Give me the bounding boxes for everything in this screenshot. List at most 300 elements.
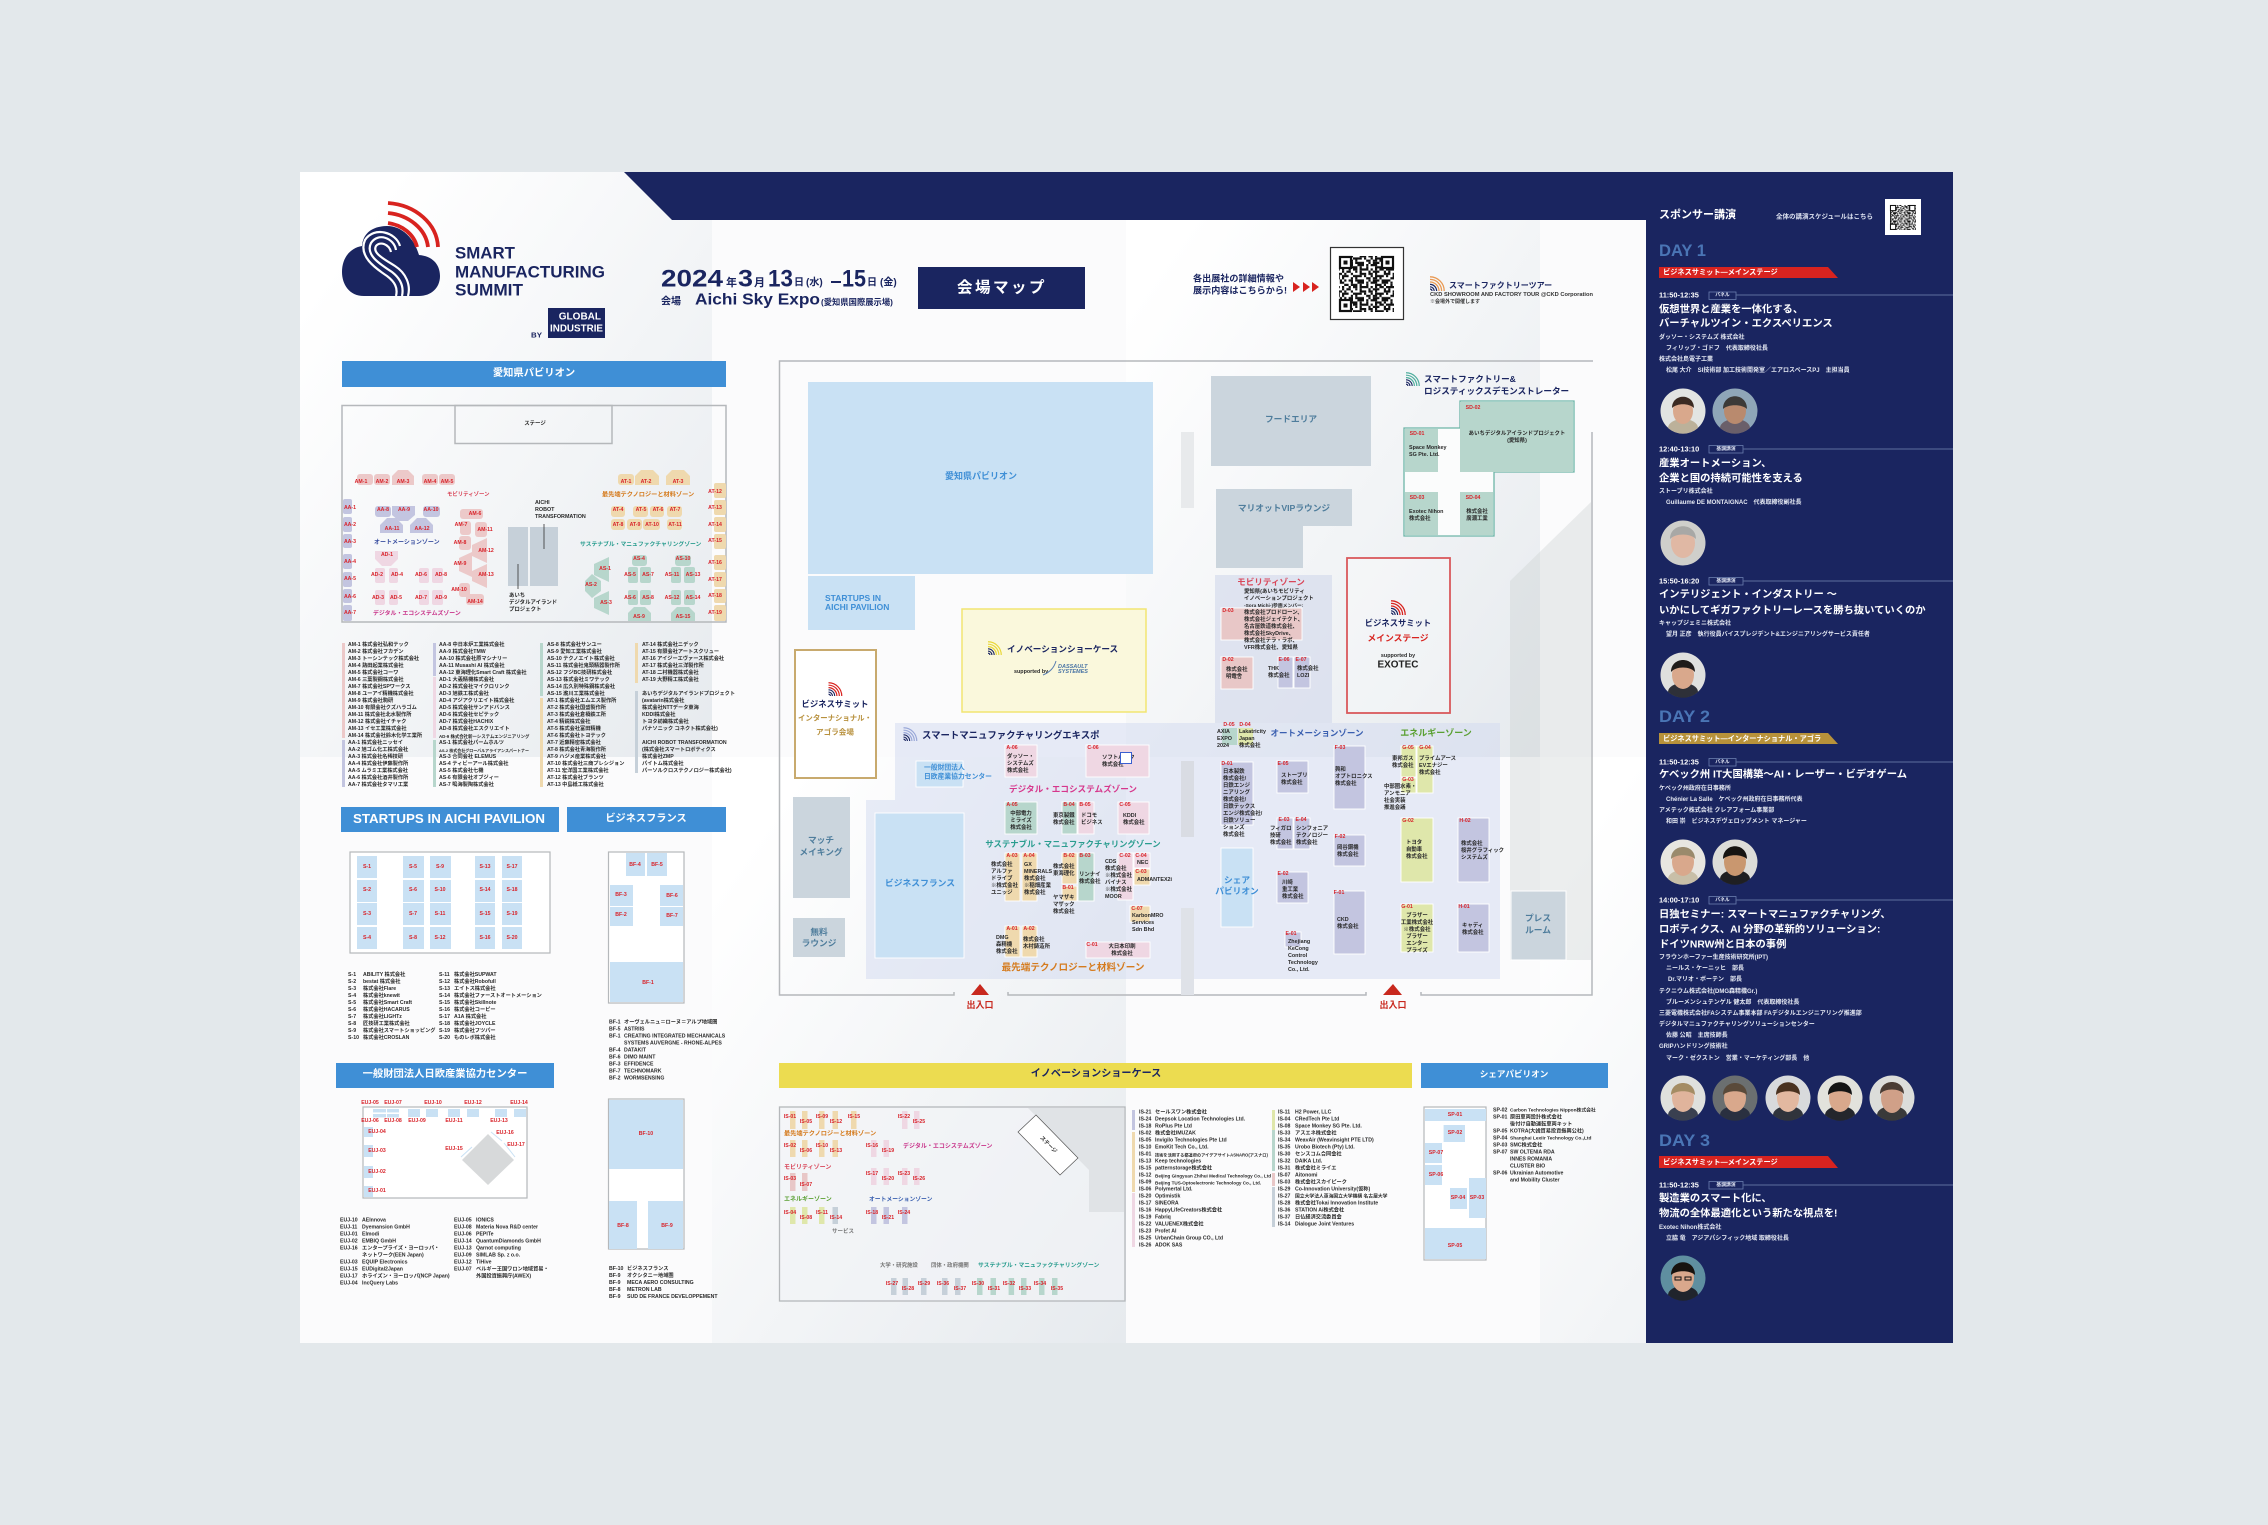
talk: logistics optimisation: 物流の全体最適化という新たな視点を! [1659,1206,1837,1220]
booths: mobility zone: 株式会社ジェイテクト、 [1244,615,1303,623]
exhibitor list: Startups: 株式会社コーピー [454,1005,496,1013]
exhibitor list: Aichi pavilion: AA-7 株式会社タマリ工業 [348,780,409,788]
floor plan: EU-Japan Centre: EUJ-14 [510,1100,528,1106]
floor plan: innovation showcase: IS-10 [816,1143,828,1149]
heading: share pavilion: シェアパビリオン [1480,1068,1549,1079]
booths: energy zone: G-01 [1401,904,1413,910]
floor plan: Aichi pavilion: AS-10 [676,556,690,562]
exhibitor list: Startups: S-8 [348,1021,356,1027]
logo: Smart Manufacturing Summit [342,203,605,340]
exhibitor list: Business France upper: BF-5 [609,1027,621,1033]
booths: sustainable and advanced row: A-03 [1006,853,1018,859]
floor plan: Aichi pavilion: AT-1 [621,479,632,485]
floor plan: Aichi pavilion: AS-5 [624,572,636,578]
exhibitor list: Aichi pavilion: AS-13 株式会社ミワテック [547,675,610,683]
booths: sustainable and advanced row: GX [1024,862,1032,868]
floor plan: Aichi pavilion: AS-14 [686,595,700,601]
event date and venue [661,266,897,308]
floor plan: innovation showcase: IS-32 [1003,1281,1015,1287]
booths: automation zone: 岡谷鋼機 [1337,843,1359,851]
exhibitor list: Aichi pavilion: AT-3 株式会社倉橋鉄工所 [547,710,607,718]
talk: Quebec: Chénier La Salle ケベック州政府在日事務所代表 [1666,795,1803,803]
exhibitor list: share pavilion: SP-05 [1493,1129,1508,1135]
booths: second row: ミライズ [1010,816,1032,824]
zone heading: mobility: モビリティゾーン [1237,576,1305,587]
floor plan: innovation showcase: IS-35 [1051,1286,1063,1292]
floor plan: Startups: S-18 [507,887,518,893]
mobility booths [357,470,487,605]
floor plan: Aichi pavilion: AT-13 [708,505,722,511]
booths: second row: ビジネス [1081,818,1103,826]
exhibitor list: Startups: 匠技研工業株式会社 [363,1019,411,1027]
floor plan: innovation showcase: IS-06 [800,1148,812,1154]
exhibitor list: share pavilion: SP-04 [1493,1136,1508,1142]
exhibitor list: EU-Japan Centre: IONICS [476,1218,494,1224]
day 3 stage banner: ビジネスサミット―メインステージ [1663,1158,1778,1166]
talk: Germany NRW seminar: 14:00-17:10 [1659,896,1699,904]
floor plan: Aichi pavilion: AS-3 [600,600,612,606]
day 2 stage banner: ビジネスサミット―インターナショナル・アゴラ [1663,734,1821,743]
speaker photo [1818,1076,1862,1121]
floor plan: Aichi pavilion: AT-7 [670,507,681,513]
venue outline [780,361,1593,995]
floor plan: Startups: S-12 [435,935,446,941]
exhibitor list: innovation showcase: Profet AI [1155,1229,1177,1235]
floor plan: Business France lower [608,1099,684,1249]
talk: intelligent industry [1659,576,1953,638]
smart factory tour note [1430,277,1593,305]
floor plan: Aichi pavilion: AA-8 [377,507,389,513]
booths: digital ecosystem zone upper: C-06 [1087,745,1099,751]
floor plan: innovation showcase: IS-13 [830,1148,842,1154]
booths: automation zone: F-03 [1335,745,1345,751]
floor plan: Aichi pavilion: AA-1 [344,505,356,511]
smart factory tour note: スマートファクトリーツアー [1449,280,1552,290]
floor plan: Aichi pavilion: AM-8 [454,540,466,546]
event date and venue: 15 [842,266,866,292]
exhibitor list: EU-Japan Centre: ベルギー王国ワロン地域貿易・ [476,1265,549,1273]
exhibitor list: innovation showcase: IS-34 [1278,1138,1291,1144]
floor plan: EU-Japan Centre: EUJ-17 [507,1142,525,1148]
exhibitor list: share pavilion: SP-06 [1493,1171,1508,1177]
booths: energy zone: 株式会社 [1406,852,1428,860]
booths: D-04 and D-05: EXPO [1217,736,1232,742]
exhibitor list: Aichi pavilion: AD-7 株式会社HACHIX [439,717,494,725]
floor plan: Aichi pavilion: AD-7 [415,595,427,601]
exhibitor list: innovation showcase: Aitonomi [1295,1173,1318,1179]
exhibitor list: EU-Japan Centre: EUJ-08 [454,1225,472,1231]
floor plan: EU-Japan Centre: EUJ-10 [424,1100,442,1106]
floor plan: EU-Japan Centre: EUJ-12 [464,1100,482,1106]
booths: sustainable and advanced row: A-04 [1023,853,1035,859]
booths: sustainable and advanced row: 株式会社 [1053,862,1075,870]
booths: energy zone: 株式会社 [1461,839,1483,847]
floor plan: Startups [350,852,550,953]
exhibitor list: Business France lower: BF-8 [609,1287,621,1293]
speaker photo [1660,1076,1706,1121]
exhibitor list: innovation showcase: ADOK SAS [1155,1243,1183,1249]
zone label: sustainable manufacturing: サステナブル・マニュファクチャリングゾーン [580,540,702,548]
exhibitor list: Startups: S-16 [439,1007,450,1013]
booths: automation zone: 株式会社 [1270,838,1292,846]
floor plan: Business France lower: BF-8 [617,1223,629,1229]
exhibitor list: innovation showcase: IS-36 [1278,1208,1291,1214]
exhibitor list: Startups: S-10 [348,1035,359,1041]
booths: automation zone: 株式会社 [1282,892,1304,900]
area: matchmaking [793,797,850,898]
floor plan: innovation showcase: IS-11 [816,1210,828,1216]
booths: mobility zone: 株式会社テラ・ラボ、 [1244,636,1298,644]
floor plan: Startups: S-10 [435,887,446,893]
entrance arrow right: 出入口 [1379,999,1407,1010]
exhibitor list: Aichi pavilion: AD-6 株式会社セピテック [439,710,499,718]
floor plan: Aichi pavilion: AD-2 [371,572,383,578]
booths: automation zone: KeCong [1288,946,1309,952]
booths: D-04 and D-05: Japan [1239,736,1255,742]
floor plan: Aichi pavilion: AA-4 [344,559,356,565]
floor plan: Business France lower: BF-10 [639,1131,653,1137]
logo: Smart Manufacturing Summit: SUMMIT [455,280,524,300]
booths: sustainable and advanced row: ※株式会社 [1105,871,1133,879]
exhibitor list: Business France lower: ビジネスフランス [627,1264,668,1272]
booths: mobility zone: 株式会社 [1297,664,1319,672]
exhibitor list: Aichi pavilion: AD-5 株式会社サンアドバンス [439,703,510,711]
floor plan: Aichi pavilion: AT-4 [613,507,624,513]
exhibitor list: innovation showcase: WeavAir (Weavinsight PTE LTD) [1295,1138,1374,1144]
panel: main venue map [780,361,1593,1010]
floor plan: Aichi pavilion: AS-4 [633,556,645,562]
booths: automation zone: 株式会社 [1281,778,1303,786]
exhibitor list: Aichi pavilion: AS-7 鳴海製陶株式会社 [439,780,495,788]
exhibitor list: innovation showcase: Polymertal Ltd. [1155,1187,1193,1193]
area: innovation showcase [962,609,1146,712]
floor plan: Aichi pavilion: AT-6 [653,507,664,513]
booths: automation zone: フィガロ [1270,824,1291,832]
booths: sustainable and advanced row: 株式会社 [1053,907,1075,915]
exhibitor list: Aichi pavilion: AT-6 株式会社トヨテック [547,731,606,739]
floor plan: innovation showcase: IS-31 [988,1286,1000,1292]
panel: Business France [567,807,726,1300]
digital ecosystem booths [375,551,443,605]
exhibitor list: innovation showcase: 株式会社IMUZAK [1155,1129,1196,1137]
floor plan: Business France upper: BF-6 [666,893,678,899]
floor plan: EU-Japan Centre: EUJ-11 [445,1118,463,1124]
area: Startups in Aichi pavilion: AICHI PAVILION [825,602,889,612]
talk: intelligent industry: いかにしてギガファクトリーレースを勝ち抜いていくのか [1659,604,1926,616]
booths: front row: C-01 [1086,942,1098,948]
exhibitor list: EU-Japan Centre: EUJ-17 [340,1274,358,1280]
area: Startups in Aichi pavilion [808,576,915,630]
exhibitor list: Aichi pavilion: (株式会社スマートロボティクス [642,745,716,753]
exhibitor list: innovation showcase: IS-28 [1278,1201,1291,1207]
talk: digital twin: バーチャルツイン・エクスペリエンス [1659,318,1833,330]
floor plan: Aichi pavilion: AT-8 [613,522,624,528]
exhibitor list: innovation showcase: IS-17 [1139,1201,1152,1207]
exhibitor list: innovation showcase: IS-13 [1139,1159,1152,1165]
floor plan: Aichi pavilion: AM-2 [376,479,388,485]
area: free lounge [793,918,845,957]
floor plan: innovation showcase: オートメーションゾーン [869,1196,933,1203]
booths: energy zone: 桜井グラフィック [1461,846,1504,854]
exhibitor list: Aichi pavilion: AT-11 宏洋国工業株式会社 [547,766,609,774]
exhibitor list: innovation showcase: DAIKA Ltd. [1295,1159,1323,1165]
booths: energy zone: G-04 [1419,745,1431,751]
exhibitor list: Aichi pavilion: トヨタ紡織株式会社 [642,717,690,725]
heading: EU-Japan Centre: 一般財団法人日欧産業協力センター [363,1067,527,1080]
exhibitor list: innovation showcase: 国立大学法人東海国立大学機構 名古屋大学 [1295,1192,1388,1199]
exhibitor list: EU-Japan Centre: Qarnot computing [476,1246,521,1252]
area: smart factory and logistics demonstrator: SD-01 [1410,431,1424,437]
floor plan: innovation showcase: 大学・研究施設 [880,1261,918,1269]
booths: front row: A-02 [1023,926,1035,932]
floor plan: share pavilion: SP-04 [1451,1195,1465,1201]
floor plan: Startups: S-3 [363,911,371,917]
booths: automation zone: D-01 [1221,761,1233,767]
talk: industrial automation: 企業と国の持続可能性を支える [1659,472,1803,484]
booths: energy zone: 東邦ガス [1392,754,1414,762]
exhibitor list: share pavilion: SP-01 [1493,1115,1508,1121]
exhibitor list: innovation showcase: IS-19 [1139,1215,1152,1221]
area: smart factory and logistics demonstrator: SD-02 [1466,405,1480,411]
exhibitor list: Startups: 株式会社Robofull [454,977,496,985]
booths: mobility zone: 愛知県(あいちモビリティ [1244,587,1305,595]
floor plan: EU-Japan Centre: EUJ-04 [368,1129,386,1135]
booths: energy zone: G-02 [1402,818,1414,824]
floor plan: innovation showcase: IS-07 [800,1182,812,1188]
talk: logistics optimisation [1659,1180,1953,1242]
floor plan: Aichi pavilion: AA-5 [344,576,356,582]
floor plan: EU-Japan Centre: EUJ-03 [368,1148,386,1154]
booths: automation zone: Zhejiang [1288,939,1310,945]
booths: mobility zone: 明電舎 [1226,672,1243,680]
heading: Startups: STARTUPS IN AICHI PAVILION [353,812,545,826]
booths: automation zone: 株式会社 [1335,779,1357,787]
event date and venue: 2024 [661,266,724,292]
talk: Quebec: 和田 崇 ビジネスデヴェロップメント マネージャー [1666,817,1807,825]
floor plan: EU-Japan Centre: EUJ-05 [361,1100,379,1106]
talk: Germany NRW seminar: フラウンホーファー生産技術研究所(IPT) [1659,953,1768,961]
booths: automation zone: 興和 [1335,765,1346,773]
floor plan: Startups: S-1 [363,864,371,870]
area: Business Summit International Agora [795,650,876,778]
exhibitor list: Startups: S-11 [439,972,450,978]
area: smart factory and logistics demonstrator: Space Monkey [1409,445,1446,451]
exhibitor list: Aichi pavilion: AM-5 株式会社コーワ [348,668,398,676]
booths: second row [1005,802,1149,834]
exhibitor list: Startups: S-7 [348,1014,356,1020]
booths: sustainable and advanced row: B-03 [1079,853,1091,859]
booths: second row: A-05 [1006,802,1018,808]
area: innovation showcase: SYSTEMES [1058,669,1088,675]
logo: Smart Manufacturing Summit: BY [531,330,542,340]
booths: mobility zone: D-02 [1222,657,1234,663]
floor plan: innovation showcase: エネルギーゾーン [784,1195,832,1203]
booths: energy zone: 社会実装 [1384,796,1406,804]
floor plan: share pavilion: SP-01 [1448,1112,1462,1118]
area: Aichi pavilion: 愛知県パビリオン [945,470,1017,481]
exhibitor list: EU-Japan Centre [340,1218,549,1287]
booths: automation zone: テクノロジー [1296,831,1328,839]
expo title: スマートマニュファクチャリングエキスポ [922,730,1099,740]
booths: sustainable and advanced row: ※株式会社 [991,881,1019,889]
exhibitor list: EU-Japan Centre: EUJ-12 [454,1260,472,1266]
event date and venue: 日 [794,276,804,288]
exhibitor list: innovation showcase: VALUENEX株式会社 [1155,1220,1204,1228]
exhibitor list: Aichi pavilion: AA-9 株式会社TMW [439,647,486,655]
booths: automation zone: ションズ [1223,823,1245,831]
talk: logistics optimisation: 基調講演 [1716,1181,1736,1188]
exhibitor list: Business France lower: METRON LAB [627,1287,662,1293]
talk: Germany NRW seminar: ブルーメンシュテンゲル 健太郎 代表取締役社長 [1666,998,1799,1006]
area: press room: プレス [1525,913,1551,923]
booths: sustainable and advanced row: Sdn Bhd [1132,927,1154,933]
area: smart factory and logistics demonstrator: あいちデジタルアイランドプロジェクト [1469,429,1565,437]
floor plan: innovation showcase: IS-28 [902,1286,914,1292]
exhibitor list: innovation showcase: IS-33 [1278,1131,1291,1137]
exhibitor list: innovation showcase: 株式会社Tokai Innovation Institute [1295,1199,1378,1207]
floor plan: Aichi pavilion: AM-6 [469,511,481,517]
booths: digital ecosystem zone upper: システムズ [1007,759,1034,767]
exhibitor list: innovation showcase: Dialogue Joint Ventures [1295,1222,1354,1228]
exhibitor list: innovation showcase [1132,1108,1388,1249]
talk: digital twin: 11:50-12:35 [1659,290,1699,300]
exhibitor list: Business France lower: オクシタニー地域圏 [627,1271,674,1279]
booths: energy zone: ブラザー [1406,932,1428,940]
floor plan: Aichi pavilion: AM-10 [451,587,467,593]
exhibitor list: Startups: 株式会社CROSLAN [363,1033,410,1041]
booths: automation zone: 株式会社 [1337,922,1359,930]
booths: automation zone: ニアリング [1223,788,1251,796]
talk: Quebec: 11:50-12:35 [1659,758,1699,766]
booths: digital ecosystem zone upper: ソフトバンク [1102,753,1135,761]
talk: Quebec: パネル [1715,758,1730,765]
zone label: automation: オートメーションゾーン [374,539,440,546]
floor plan: Aichi pavilion: AT-3 [673,479,684,485]
floor plan: innovation showcase: IS-02 [784,1143,796,1149]
area: press room: ルーム [1525,925,1551,935]
exhibitor list: EU-Japan Centre: EUJ-15 [340,1267,358,1273]
day 3 heading: DAY 3 [1659,1132,1710,1150]
exhibitor list: Startups: S-9 [348,1028,356,1034]
talk: digital twin [1659,290,1953,374]
area: Business Summit main stage: ビジネスサミット [1365,618,1431,628]
exhibitor list: Aichi pavilion: (avatarin株式会社 [642,696,685,704]
exhibitor list: innovation showcase: EmoKit Tech Co., Ltd. [1155,1145,1209,1151]
exhibitor list: Startups: 株式会社Flare [363,984,396,992]
booths: D-04 and D-05: Lakatricity [1239,729,1266,735]
panel: share pavilion [1421,1063,1608,1260]
talk: logistics optimisation: 製造業のスマート化に、 [1659,1192,1772,1204]
booths: automation zone: 株式会社 [1223,830,1245,838]
floor plan: innovation showcase: IS-17 [866,1171,878,1177]
exhibitor list: innovation showcase: IS-29 [1278,1187,1291,1193]
floor plan: innovation showcase: IS-21 [882,1215,894,1221]
booth: share pavilion: パビリオン [1215,885,1259,896]
booths: automation zone: Control [1288,953,1308,959]
booths: sustainable and advanced row: ※株式会社 [1105,885,1133,893]
talk: industrial automation [1659,444,1953,506]
exhibitor list: Aichi pavilion: AT-12 株式会社ブランツ [547,773,604,781]
exhibitor list: innovation showcase: SINEORA [1155,1201,1179,1207]
booths: energy zone: エンター [1406,939,1428,947]
floor plan: Aichi pavilion: AM-14 [467,599,483,605]
floor plan: Aichi pavilion: AM-3 [397,479,409,485]
talk: Germany NRW seminar: パネル [1715,896,1730,903]
exhibitor list: Aichi pavilion: AS-3 合同会社 ELEMUS [439,752,497,760]
booth: EU-Japan Centre: 一般財団法人 [924,762,965,772]
floor plan: innovation showcase: IS-23 [898,1171,910,1177]
floor plan: innovation showcase: IS-19 [882,1148,894,1154]
exhibitor list: Aichi pavilion: AA-8 中日本炉工業株式会社 [439,640,505,648]
exhibitor list: Aichi pavilion: AT-4 精鋭株式会社 [547,717,591,725]
booths: sustainable and advanced row: 株式会社 [1024,888,1046,896]
exhibitor list: Startups: 株式会社フツパー [454,1026,496,1034]
robot transformation blocks: TRANSFORMATION [535,514,586,520]
booths: sustainable and advanced row: B-02 [1063,853,1075,859]
talk: digital twin: 仮想世界と産業を一体化する、 [1659,302,1803,316]
exhibitor list: Startups: ものレボ株式会社 [454,1033,496,1041]
exhibitor list: Startups: S-2 [348,979,356,985]
booths: energy zone: 工業株式会社 [1401,918,1434,926]
floor plan: Aichi pavilion: AT-19 [708,610,722,616]
floor plan: share pavilion: SP-07 [1429,1150,1443,1156]
exhibitor list: Aichi pavilion: パナソニック コネクト株式会社) [642,724,718,732]
floor plan: Aichi pavilion: AM-5 [441,479,453,485]
floor plan: Aichi pavilion: AT-15 [708,538,722,544]
booths: mobility zone: VFR株式会社、愛知県 [1244,643,1299,651]
exhibitor list: Startups: 株式会社スマートショッピング [363,1026,436,1034]
automation booths [343,499,440,621]
booths: mobility zone: LOZI [1297,673,1310,679]
booths: sustainable and advanced row: ヤマザキ [1053,893,1075,901]
exhibitor list: EU-Japan Centre: EUJ-06 [454,1232,472,1238]
robot transformation blocks: あいち [509,591,525,599]
exhibitor list: EU-Japan Centre: EUJ-01 [340,1232,358,1238]
zone heading: sustainable manufacturing: サステナブル・マニュファクチャリングゾーン [985,839,1161,849]
exhibitor list: share pavilion: Shanghai Lexiir Technology Co.,Ltd [1510,1135,1592,1141]
booths: sustainable and advanced row: MINERALS [1024,869,1053,875]
floor plan: Startups: S-19 [507,911,518,917]
floor plan: innovation showcase: サービス [832,1227,854,1235]
exhibitor list: Business France upper: BF-3 [609,1062,621,1068]
floor plan: Business France upper: BF-7 [666,913,678,919]
exhibitor list: Business France upper: オーヴェルニュ＝ローヌ＝アルプ地域圏 [624,1018,717,1026]
exhibitor list: Startups: S-5 [348,1000,356,1006]
speaker photo [1660,840,1706,885]
floor plan: Startups: S-2 [363,887,371,893]
floor plan: Aichi pavilion: AT-9 [630,522,641,528]
floor plan: innovation showcase: IS-36 [937,1281,949,1287]
exhibitor list: Aichi pavilion: AS-10 テクノエイト株式会社 [547,654,616,662]
floor plan: Aichi pavilion: AA-3 [344,539,356,545]
talk: digital twin: 松尾 大介 SI技術部 加工技術開発室／エアロスペースPJ 主担当員 [1666,366,1850,374]
exhibitor list: Business France upper: BF-1 [609,1020,621,1026]
floor plan: Startups: S-14 [480,887,491,893]
booths: automation zone: CKD [1337,917,1349,923]
booths: energy zone: H-01 [1458,904,1470,910]
floor plan: innovation showcase: ステージ [1038,1135,1059,1155]
exhibitor list: innovation showcase: IS-07 [1278,1173,1291,1179]
exhibitor list: innovation showcase: patternstorage株式会社 [1155,1164,1213,1172]
area: Business Summit main stage [1347,558,1450,713]
exhibitor list: Aichi pavilion: AS-8 株式会社サンユー [547,640,602,648]
floor plan: Aichi pavilion: AD-4 [391,572,403,578]
booths: sustainable and advanced row: ドライブ [991,874,1013,882]
exhibitor list: EU-Japan Centre: ホライズン・ヨーロッパ(NCP Japan) [362,1272,450,1280]
exhibitor list: share pavilion: SP-02 [1493,1108,1508,1114]
floor plan: Aichi pavilion: AT-14 [708,522,722,528]
heading: EU-Japan Centre [336,1063,554,1088]
